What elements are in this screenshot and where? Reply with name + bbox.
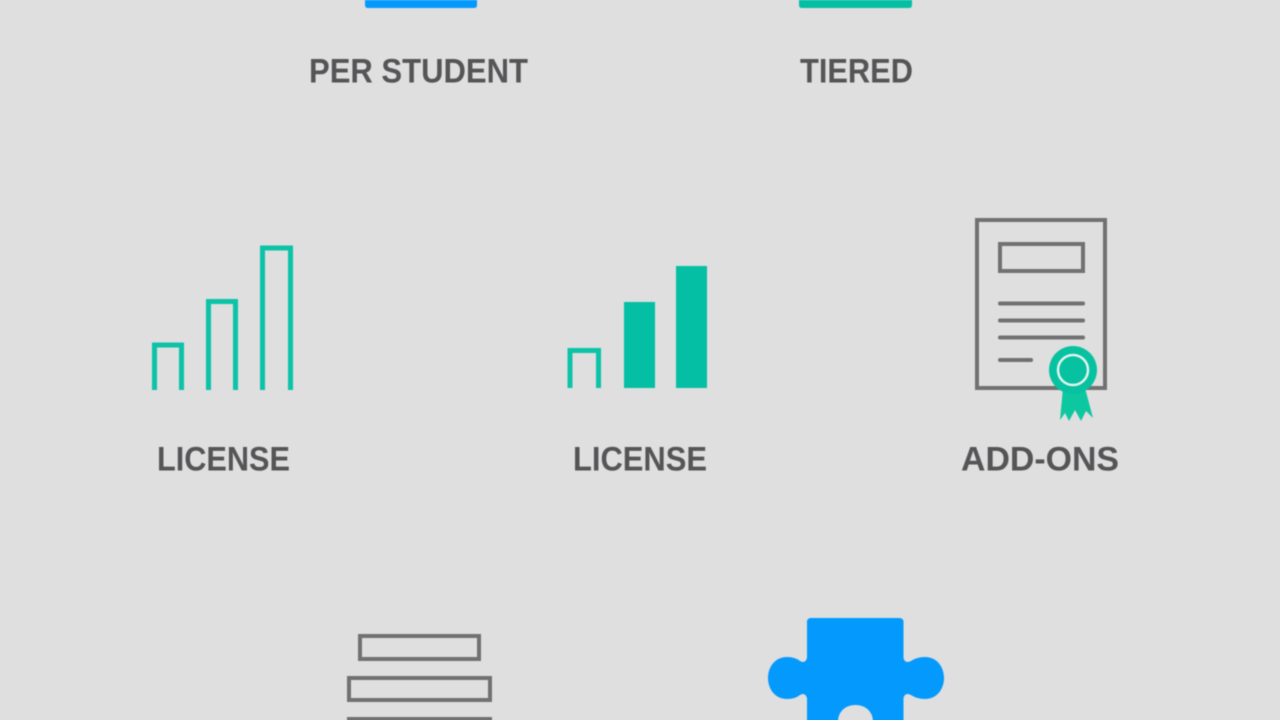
icon: stacked books (cropped) [349,636,490,720]
icon: partly filled bar chart [570,266,707,388]
label: per student: PER STUDENT [309,52,528,90]
icon: puzzle piece (cropped) [768,618,944,720]
label: tiered: TIERED [800,52,913,90]
label: license, centre: LICENSE [573,440,707,478]
icon: outlined bar chart [154,248,290,390]
icon: certificate with ribbon seal [977,220,1105,421]
label: add-ons: ADD-ONS [961,440,1119,478]
icon: per student (cropped blue block) [365,0,477,8]
icon: tiered (cropped teal block) [799,0,912,8]
label: license, left: LICENSE [157,440,290,478]
